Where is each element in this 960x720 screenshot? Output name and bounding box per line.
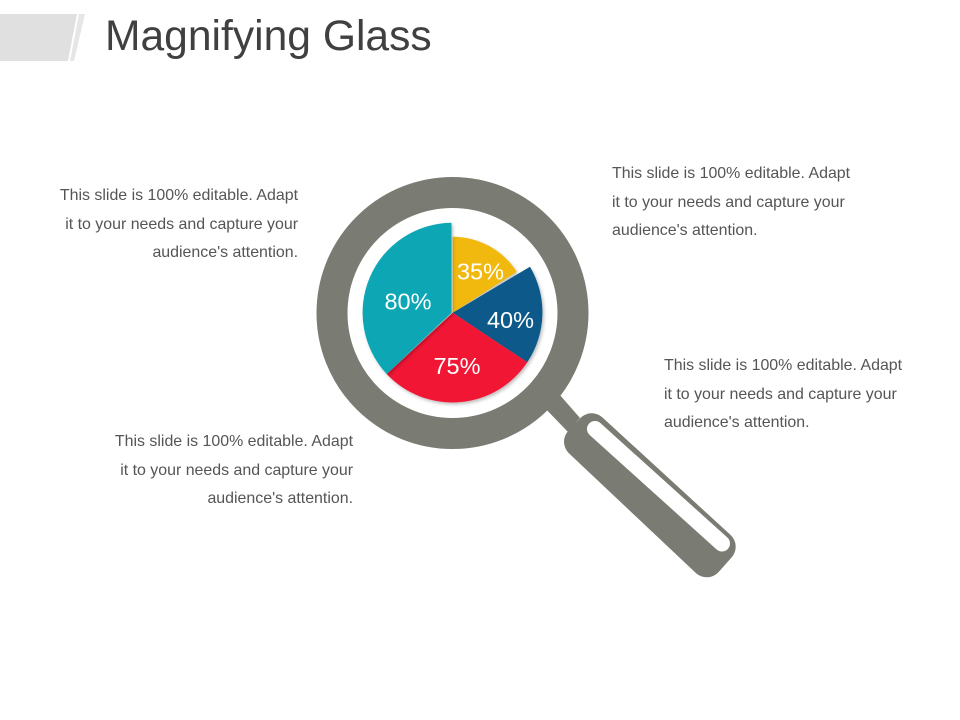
text block: upper right: This slide is 100% editable. Adapt [612,165,850,182]
title banner [0,14,85,61]
text block: lower right: it to your needs and capture your [664,386,897,402]
text block: upper left [60,187,298,261]
label 35%: 35% [457,258,504,284]
slice: 80% teal [363,223,452,374]
text block: lower left: audience's attention. [207,490,353,507]
label 80%: 80% [384,288,432,314]
text block: upper right: audience's attention. [612,222,758,239]
label 75%: 75% [433,353,481,379]
slice: 40% blue [453,267,542,362]
slice: 35% yellow [453,237,517,313]
label 40%: 40% [487,307,534,333]
text block: upper left: This slide is 100% editable. Adapt [60,187,298,204]
text block: lower right: This slide is 100% editable. Adapt [664,357,902,374]
text block: lower left: This slide is 100% editable. Adapt [115,433,353,450]
text block: upper right: it to your needs and capture your [612,194,845,210]
text block: lower left: it to your needs and capture your [120,462,353,478]
text block: upper right [612,165,850,239]
pie chart [363,223,542,402]
title: Magnifying Glass [105,12,432,60]
text block: upper left: it to your needs and capture your [65,216,298,232]
text block: upper left: audience's attention. [152,244,298,261]
handle slot [595,429,722,544]
text block: lower right [664,357,902,431]
magnifier neck [540,386,580,432]
magnifier handle [580,429,720,561]
text block: lower right: audience's attention. [664,414,810,431]
slice: 75% red [387,313,527,402]
magnifier ring [332,192,573,434]
text block: lower left [115,433,353,507]
